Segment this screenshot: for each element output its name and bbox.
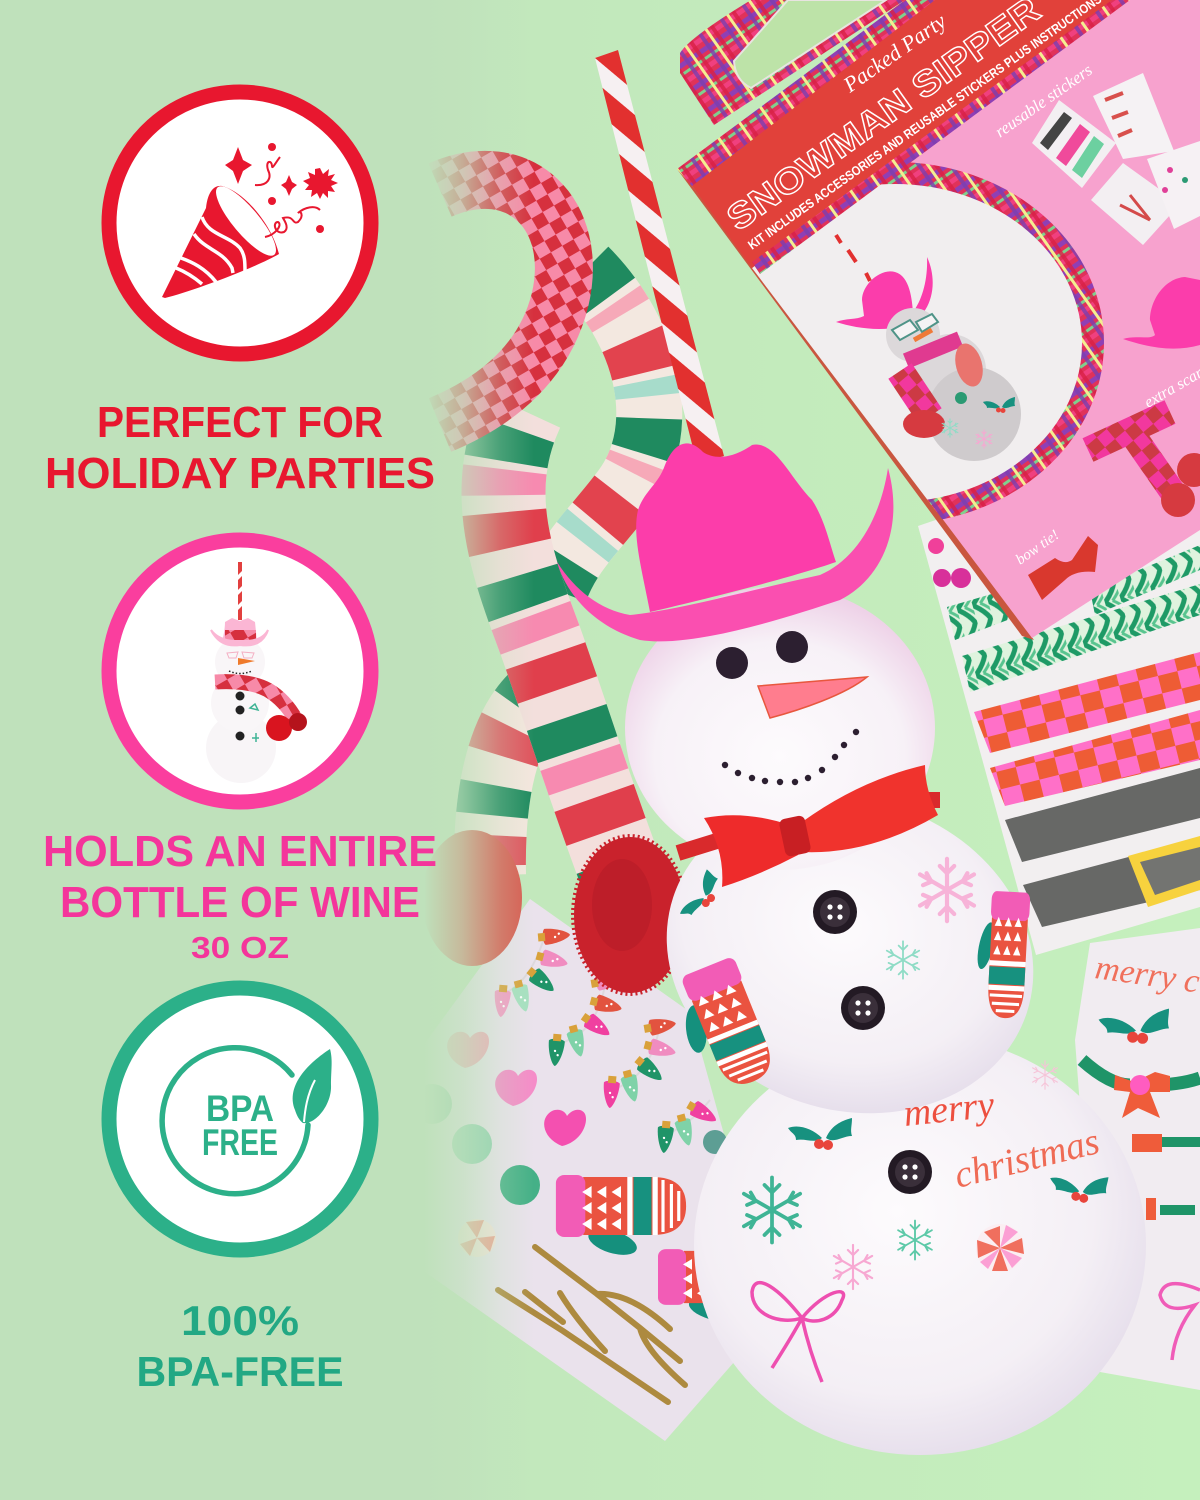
snowman nose xyxy=(758,677,867,718)
icon: BPA free leaf: BPA xyxy=(206,1088,274,1129)
light strings xyxy=(493,927,720,1154)
scarf strip: checkered xyxy=(440,180,564,425)
snowman head xyxy=(625,586,935,870)
left fade overlay xyxy=(424,0,534,1500)
scarf strip: lower left xyxy=(490,690,545,875)
feature: BPA free xyxy=(109,988,371,1395)
sticker sheet: left xyxy=(412,899,782,1441)
box front xyxy=(690,0,1200,638)
icon: BPA free leaf: FREE xyxy=(202,1122,278,1163)
pom-pom: faded xyxy=(422,830,522,966)
heading: BPA free: 100% xyxy=(181,1297,299,1344)
heading: capacity: HOLDS AN ENTIRE xyxy=(43,827,437,876)
kit box xyxy=(677,0,1200,640)
box illustration: snowman xyxy=(836,235,1021,461)
heading: BPA free: BPA-FREE xyxy=(136,1348,344,1395)
snowman bottom ball xyxy=(694,1035,1146,1455)
circle badge: BPA free xyxy=(109,988,371,1250)
box illustration: second hat xyxy=(1123,277,1200,349)
snowman smile xyxy=(722,729,859,785)
hat xyxy=(557,443,893,641)
peppermint candy xyxy=(976,1224,1024,1272)
snowman sipper xyxy=(557,443,1146,1455)
text: christmas: christmas xyxy=(950,1120,1104,1197)
snowman eyes xyxy=(716,631,808,679)
red band xyxy=(690,0,1118,268)
box caption: bow: bow tie! xyxy=(1013,527,1062,568)
circle badge: capacity xyxy=(109,540,371,802)
box title: SNOWMAN SIPPER xyxy=(719,0,1047,239)
heading: capacity: BOTTLE OF WINE xyxy=(60,878,420,927)
hearts and buttons xyxy=(412,1032,727,1257)
box handle xyxy=(680,0,905,125)
snowman middle ball xyxy=(625,750,1075,1160)
text: merry: merry xyxy=(902,1084,996,1135)
scarf xyxy=(440,180,649,875)
mitten stickers xyxy=(661,890,1031,1100)
box side xyxy=(677,169,1034,640)
box mini sticker sheets xyxy=(1032,73,1200,245)
pink ribbon xyxy=(752,1283,844,1382)
snowflake stickers xyxy=(744,859,1057,1289)
scarf strip: right loop xyxy=(555,270,649,590)
snowman buttons xyxy=(813,890,932,1194)
subheading: 30 oz: 30 OZ xyxy=(191,930,289,965)
icon: BPA free leaf xyxy=(162,1048,332,1194)
box illustration: bow xyxy=(1028,536,1098,600)
plaid trim lower xyxy=(752,0,1130,274)
icon: party popper xyxy=(162,143,338,298)
scarf strip: main xyxy=(503,410,620,870)
pom-pom: red xyxy=(573,836,687,994)
icon: mini snowman xyxy=(206,562,307,783)
box caption: reusable stickers: reusable stickers xyxy=(991,60,1096,141)
plaid trim xyxy=(677,0,935,186)
red bow tie xyxy=(678,765,940,887)
straw xyxy=(595,50,724,464)
box illustration: scarf xyxy=(1088,412,1178,500)
mittens on sheet xyxy=(556,1175,686,1260)
feature: capacity xyxy=(43,540,437,965)
heading: party: PERFECT FOR xyxy=(97,398,383,447)
heading: party: HOLIDAY PARTIES xyxy=(45,449,435,498)
sticker sheet: belts and garlands xyxy=(918,430,1200,955)
sticker sheet: right lower: merry c xyxy=(1093,949,1200,1001)
gold antlers xyxy=(498,1247,685,1402)
circle badge: party xyxy=(109,92,371,354)
feature: party xyxy=(45,92,435,498)
box illustration: pom-poms xyxy=(1161,453,1200,517)
sticker sheet: right lower xyxy=(1075,928,1200,1390)
box brand: Packed Party xyxy=(838,8,951,98)
holly stickers xyxy=(674,869,1108,1206)
left panel background xyxy=(0,0,425,1500)
white circle with plaid ring xyxy=(697,173,1093,513)
